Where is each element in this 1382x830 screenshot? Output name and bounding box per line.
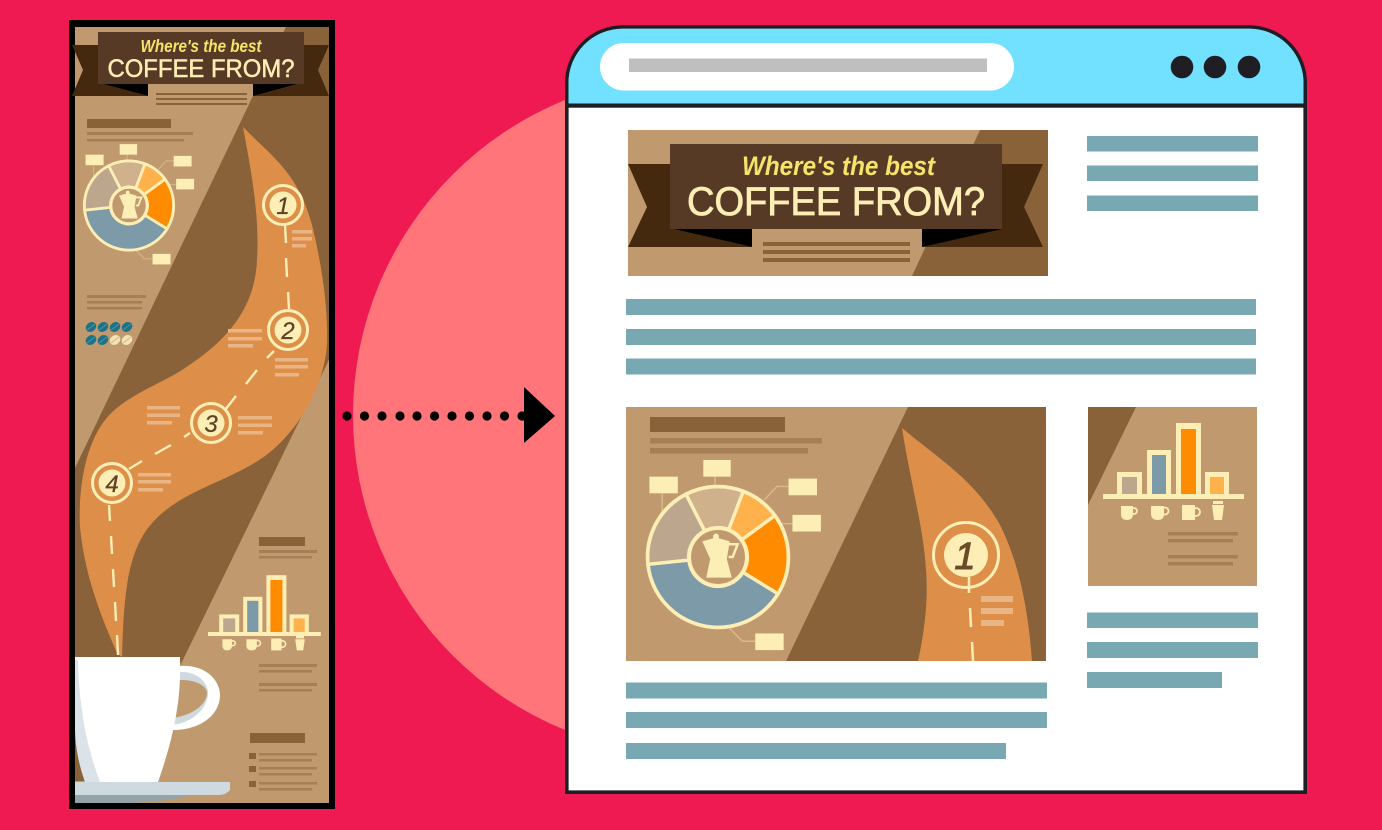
page text lines — [626, 136, 1258, 759]
icons: coffee cups — [1121, 501, 1224, 520]
step 1 marker — [264, 186, 302, 224]
step text placeholders — [138, 230, 312, 492]
step 3 marker — [192, 404, 230, 442]
bar chart: large — [1103, 423, 1244, 499]
step 1 marker: 1 — [276, 193, 290, 220]
panel: enlarged infographic header: Where's the best — [742, 151, 936, 181]
checklist — [249, 733, 317, 790]
step 1 marker: large: 1 — [954, 536, 976, 578]
background circle — [353, 75, 1033, 755]
step 2 marker — [268, 310, 308, 350]
bar chart text — [259, 537, 317, 558]
panel: enlarged infographic header: COFFEE FROM? — [687, 180, 985, 224]
step 3 marker: 3 — [204, 411, 218, 438]
step 1 marker: large — [934, 522, 998, 588]
bar chart: small — [208, 575, 321, 650]
step 4 marker — [92, 464, 132, 502]
bar chart notes — [259, 664, 317, 692]
infographic banner: Where's the best — [140, 36, 263, 56]
intro text lines — [87, 119, 193, 142]
step 4 marker: 4 — [105, 471, 119, 498]
mid text lines — [87, 295, 146, 310]
panel: tall infographic thumbnail — [69, 20, 335, 809]
donut chart: small — [84, 144, 194, 264]
icon: white coffee cup and saucer — [75, 657, 230, 803]
infographic banner: COFFEE FROM? — [108, 55, 294, 83]
panel: enlarged infographic header — [628, 130, 1048, 276]
steam path dashes — [109, 225, 289, 655]
panel: enlarged bar chart crop — [1088, 407, 1257, 586]
donut chart: large — [647, 460, 821, 650]
browser title bar — [567, 29, 1305, 108]
panel: enlarged donut chart crop — [626, 407, 1046, 661]
infographic banner — [72, 32, 329, 105]
arrow: dotted arrow from infographic to web page — [342, 387, 555, 443]
icon: coffee bean rating — [84, 320, 134, 347]
step 2 marker: 2 — [280, 318, 295, 345]
panel: browser window — [567, 27, 1305, 792]
